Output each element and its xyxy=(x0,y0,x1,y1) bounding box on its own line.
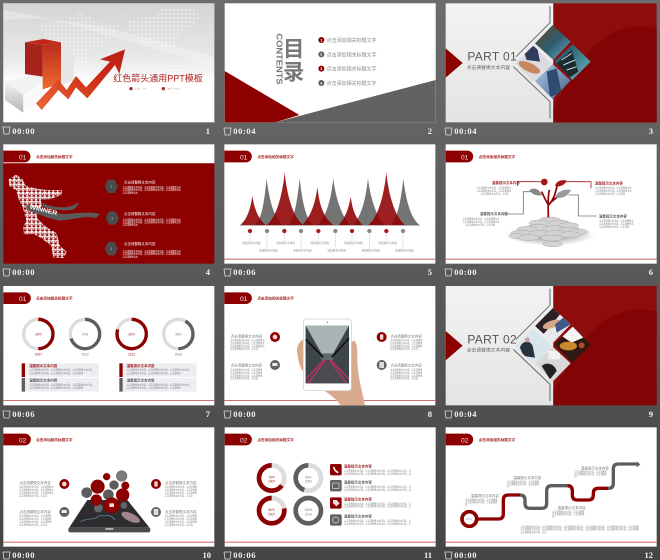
calendar item xyxy=(330,480,412,491)
slide header: 01 xyxy=(240,296,248,303)
timeline markers and labels: 请替换文字内容 xyxy=(259,249,278,253)
step text 3: 点击请替换文本内容，点击请替换 xyxy=(552,509,585,513)
ring 2010 xyxy=(70,319,100,357)
tag item: 点击请替换文本内容，点击请替换文本内容，点击请替换文本内容，点 xyxy=(344,504,412,508)
feature text right top: 点击请替换文本内容，点击请替换 xyxy=(165,485,198,489)
note 1: 点击请替换文本内容，点击请替换文本内容，点击请替换 xyxy=(29,371,84,375)
slide header xyxy=(224,151,294,162)
donut 50 percent: 50% xyxy=(305,475,312,479)
red right panel xyxy=(553,286,657,405)
connector lines xyxy=(503,182,597,216)
contents list: 点击添加相关标题文字 xyxy=(327,66,377,73)
feature text left top: 点击请替换文本内容 xyxy=(19,480,51,485)
list item 3: 点击请替换文本内容 xyxy=(124,241,156,246)
slide header: 01 xyxy=(19,296,27,303)
callout lower left xyxy=(463,211,508,226)
footer row 3: 00:04 xyxy=(454,409,477,419)
ring 2007: 30% xyxy=(35,332,42,336)
step text 3: 点击请替换文本内容，点击请替换 xyxy=(552,512,585,516)
step text 4: 温馨提示文本内容 xyxy=(581,465,609,470)
slide header xyxy=(3,151,73,162)
step text 4: 点击请替换文本内容，点击请替换 xyxy=(574,472,608,476)
slide 1: cover xyxy=(3,3,214,122)
slide header: 02 xyxy=(240,437,248,444)
feature text left top: 点击请替换文本内容，点击请 xyxy=(230,347,259,351)
contents heading: CONTENTS xyxy=(274,33,284,85)
contents heading xyxy=(274,33,304,85)
step text 1: 内 xyxy=(465,503,467,507)
list item 1: 点击请替换文本内容，点击请替换文本内容，点击请替换文本 xyxy=(123,185,182,189)
feature text left bottom: 点击请替换文本内容 xyxy=(231,363,263,368)
feature text right top: 点击请替换文本内容，点击请 xyxy=(165,494,194,498)
donut 80 percent xyxy=(259,498,284,523)
ring 2010: 2010 xyxy=(81,353,89,357)
callout top right: 点击请替换文本内容，点击请替 xyxy=(595,192,626,196)
footer row 1: 1 xyxy=(206,126,210,136)
feature text left top: 点击请替换文本内容，点击请替换文 xyxy=(19,488,54,492)
slide header xyxy=(446,151,516,162)
list item 2: 点击请替换文本内容，点击请替换文本内容，点击请替换文本 xyxy=(123,217,182,221)
contents list: 4 xyxy=(320,81,323,85)
step text 3: 内 xyxy=(552,515,554,519)
winding arrow path xyxy=(477,461,640,519)
timeline markers and labels: 请替换文字内容 xyxy=(395,249,414,253)
red pointer triangle xyxy=(446,331,463,360)
feature text left bottom: 点击请替换文本内容，点击请 xyxy=(230,376,259,380)
part heading: PART 02 xyxy=(467,332,517,346)
step text 2 xyxy=(507,475,542,489)
feature text right top: 点击请替换文本内容，点击请替换 xyxy=(390,344,423,348)
footer row 2: 4 xyxy=(206,267,211,277)
callout top left xyxy=(477,180,520,195)
list item 2: 2 xyxy=(111,216,113,220)
footer row 3: 8 xyxy=(428,409,432,419)
slide header: 02 xyxy=(19,437,27,444)
summary paragraph xyxy=(520,524,640,534)
slide 11: donut charts xyxy=(225,427,436,547)
callout top right xyxy=(595,181,632,196)
step text 1: 点击请替换文本内容，点击请替换 xyxy=(465,497,498,501)
feature text left bottom: 点击请替换文本内容，点击请 xyxy=(19,523,48,527)
calendar item: 温馨提示文本内容 xyxy=(344,480,372,485)
feature icon 2 xyxy=(59,507,69,517)
footer row 3: 7 xyxy=(206,409,211,419)
footer row 2: 00:00 xyxy=(12,267,35,277)
feature text right top: 点击请替换文本内容，点击请替换 xyxy=(390,338,423,342)
list item 1 xyxy=(105,179,182,194)
note 3: 温馨提示文本内容 xyxy=(127,363,155,368)
feature text right bottom: 点击请替换文本内容，点击请替换 xyxy=(165,520,198,524)
feature text right top: 点击请替换文本内容，点击请替换 xyxy=(165,491,198,495)
donut 50 percent: 2003 xyxy=(305,480,312,484)
timeline markers and labels: 请替换文字内容 xyxy=(344,241,363,245)
gray corner wedge xyxy=(275,80,436,122)
slide header xyxy=(224,292,294,304)
slide header: 点击添加相关标题文字 xyxy=(36,296,73,301)
footer row 4: 00:06 xyxy=(233,550,256,560)
footer row 4: 11 xyxy=(424,550,432,560)
start ring xyxy=(462,512,477,526)
note 4: 温馨提示文本内容 xyxy=(127,378,155,383)
photo diamonds xyxy=(514,23,592,100)
feature icon 4 xyxy=(151,507,161,517)
slide header: 01 xyxy=(19,154,27,161)
step text 1: 温馨提示文本内容 xyxy=(471,493,499,498)
feature text left bottom: 点击请替换文本内容，点击请替换 xyxy=(230,373,263,377)
footer row 1 xyxy=(3,126,653,136)
slide header: 点击添加相关标题文字 xyxy=(257,154,294,159)
summary paragraph: 点击请替换文本内容，点击请替换文本内容，点击请替换文本内容，点击请替换文本内容，点击请替换文本内容，点击请替换 xyxy=(520,527,640,531)
winner ribbon xyxy=(26,202,100,221)
note 1: 点击请替换文本内容，点击请替换文本内容，点击请替换文本内容， xyxy=(29,368,94,372)
slide header: 02 xyxy=(461,437,469,444)
contents list: 3 xyxy=(320,67,322,71)
list item 1: 点击请替换文本 xyxy=(123,190,139,194)
callout top left: 点击请替换文本内容，点击请替换文 xyxy=(477,185,512,189)
note 2: 点击请替换文本内容，点击请替换文本内容，点击请替换文本内容， xyxy=(29,382,94,386)
contents list: 点击添加相关标题文字 xyxy=(327,37,377,44)
list item 3: 点击请替换文本内容，点击请替换文本内容，点击请替换文本 xyxy=(123,252,182,256)
seedling xyxy=(529,179,571,217)
list item 1: 点击请替换文本内容 xyxy=(124,179,156,184)
footer row 3: 00:06 xyxy=(12,409,35,419)
callout top left: 点击请替换文本内容，点击请替换文 xyxy=(477,188,512,192)
slide header: 点击添加相关标题文字 xyxy=(479,154,516,159)
contents heading: 录 xyxy=(283,60,304,84)
coin pile xyxy=(505,217,595,247)
feature text left top: 点击请替换文本内容，点击请替换文 xyxy=(19,485,54,489)
clock item: 点击请替换文本内容，点击请替换文本内容，点击请替换文本内容，点 xyxy=(344,519,412,523)
red corner triangle xyxy=(225,71,299,122)
ring 2013 red: 60% xyxy=(129,332,135,336)
callout lower right: 点击请替换文本内容，点击请替 xyxy=(599,224,630,228)
feature text right bottom xyxy=(390,363,423,380)
note 3 xyxy=(119,363,197,377)
slide header xyxy=(446,434,516,445)
feature text left top xyxy=(19,480,54,498)
donut 70 percent xyxy=(259,465,284,491)
red right panel xyxy=(553,3,657,122)
callout top right: 点击请替换文本内容，点击请替换文本 xyxy=(595,186,632,190)
feature text left top: 点击请替换文本内容，点击请替换文 xyxy=(19,491,54,495)
calendar item: 点击请替换文本内容，点击请替换文本内容，点击请替换文本内容，点 xyxy=(344,485,412,489)
slide header xyxy=(3,434,73,445)
step text 2: 点击请替换文本内容，点击请替换 xyxy=(507,479,540,483)
feature text left bottom xyxy=(19,509,52,527)
step text 1 xyxy=(465,493,499,507)
feature text left bottom: 点击请替换文本内容 xyxy=(19,509,51,514)
phone item: 点击请替换文本内容，点击请替换文本内容，点击请替换文本内容，点 xyxy=(344,469,412,473)
note 3: 点击请替换文本内容，点击请替换文本内容，点击请替换 xyxy=(127,371,181,375)
hand holding tablet xyxy=(297,339,365,405)
feature text right top: 点击请替换文本内容，点击请替换 xyxy=(390,341,423,345)
slide header: 点击添加相关标题文字 xyxy=(257,296,294,301)
callout top right: 点击请替换文本内容，点击请替换文本 xyxy=(595,189,632,193)
donut 100 percent: 100% xyxy=(304,508,313,512)
feature text right bottom: 点击请替换文本内容，点击请替换 xyxy=(390,373,423,377)
timeline markers and labels: 请替换文字内容 xyxy=(378,241,397,245)
list item 2: 点击请替换文本 xyxy=(123,223,139,227)
callout lower right: 温馨提示文本内容 xyxy=(599,213,627,218)
phone item: 点击请替换文本内容，点击请替换文本内容，点击请替换文本内容，点 xyxy=(344,471,412,475)
step text 1: 点击请替换文本内容，点击请替换 xyxy=(465,500,498,504)
feature text left bottom: 点击请替换文本内容，点击请替换 xyxy=(19,520,52,524)
feature text right top xyxy=(390,333,423,351)
tag item: 温馨提示文本内容 xyxy=(344,496,372,501)
step text 2: 温馨提示文本内容 xyxy=(513,475,542,480)
presenter info: 汇报人：PPT xyxy=(135,87,148,91)
callout lower left: 点击请替换文本内容，点击请替换文本 xyxy=(463,219,500,223)
donut 100 percent xyxy=(296,498,321,523)
step text 2: 点击请替换文本内容，点击请替换 xyxy=(507,482,540,486)
ring 2013 red: 2013 xyxy=(128,353,135,357)
step text 3 xyxy=(552,505,586,519)
part heading: PART 01 xyxy=(467,50,517,64)
slide 2: contents xyxy=(225,3,436,122)
footer row 1: 00:00 xyxy=(12,126,35,136)
donut 100 percent: 2014 xyxy=(305,512,312,516)
slide 6: coin tree xyxy=(446,144,657,264)
ring 2007: 2007 xyxy=(35,353,42,357)
step text 4: 点击请替换文本内容，点击请替换 xyxy=(574,469,608,473)
callout lower right xyxy=(599,213,634,228)
feature text right bottom: 点击请替换文本内容，点击请替换 xyxy=(390,370,423,374)
contents heading: 目 xyxy=(283,38,304,62)
ring 2013 gray: 2013 xyxy=(175,353,182,357)
presenter info: 时间：2016.01 xyxy=(167,87,180,91)
ring 2013 gray: 40% xyxy=(175,332,182,336)
callout lower left: 温馨提示文本内容 xyxy=(480,211,508,216)
step text 3: 温馨提示文本内容 xyxy=(558,505,586,510)
slide 8: tablet in hand xyxy=(224,286,435,405)
callout top left: 点击请替换文本内容，点击请 xyxy=(481,191,510,195)
slide header: 点击添加相关标题文字 xyxy=(257,437,294,442)
phone item xyxy=(330,463,412,475)
slide 5: peak chart xyxy=(224,144,435,264)
feature text left top: 点击请替换文本内容，点击请替换文 xyxy=(230,338,265,342)
callout lower right: 点击请替换文本内容，点击请替换文 xyxy=(599,221,634,225)
step text 4 xyxy=(574,465,609,479)
callout top left: 温馨提示文本内容 xyxy=(492,180,520,185)
red content panel xyxy=(3,163,214,264)
feature text left top: 点击请替换文本内容，点击请替换文 xyxy=(230,341,265,345)
summary paragraph: 点击请替换文本内容，点击 xyxy=(520,530,547,534)
footer row 4: 10 xyxy=(202,550,211,560)
footer row 1: 00:04 xyxy=(233,126,256,136)
slide 12: winding road timeline xyxy=(446,427,657,547)
ring 2007 xyxy=(24,319,53,357)
callout lower left: 点击请替换文本内容，点击请替 xyxy=(465,222,496,226)
dotted world map xyxy=(38,8,200,77)
note 2 xyxy=(22,378,99,392)
footer row 4: 12 xyxy=(644,550,653,560)
feature text right top: 点击请替换文本内容，点击请 xyxy=(390,347,419,351)
slide header: 01 xyxy=(240,154,248,161)
feature text right top xyxy=(165,480,198,498)
clock item: 温馨提示文本内容 xyxy=(344,513,372,518)
list item 3: 3 xyxy=(110,247,112,251)
donut 80 percent: 80% xyxy=(269,508,275,512)
tag item xyxy=(330,496,412,509)
slide header: 01 xyxy=(461,154,469,161)
feature text left bottom xyxy=(230,363,263,380)
slide header: 点击添加相关标题文字 xyxy=(36,437,73,442)
tag item: 点击请替换文本内容，点击请替换文本内容，点击请替换文本内容，点 xyxy=(344,501,412,505)
donut 70 percent: 2007 xyxy=(268,480,275,484)
feature text left bottom: 点击请替换文本内容，点击请替换 xyxy=(230,367,263,371)
callout top right: 温馨提示文本内容 xyxy=(595,181,623,186)
list item 3: 点击请替换文本 xyxy=(123,254,139,258)
slide 9: part 02 xyxy=(446,286,657,405)
red rising arrow xyxy=(36,49,125,110)
timeline markers and labels: 请替换文字内容 xyxy=(310,241,329,245)
donut 70 percent: 70% xyxy=(269,475,275,479)
feature text right bottom: 点击请替换文本内容 xyxy=(165,509,197,514)
footer row 1: 3 xyxy=(649,126,653,136)
contents list: 1 xyxy=(320,38,322,42)
feature icon 3 xyxy=(377,332,387,342)
feature text right top: 点击请替换文本内容，点击请替换 xyxy=(165,488,198,492)
runner made of icons xyxy=(9,175,67,258)
feature icon 2 xyxy=(270,360,280,370)
feature text right bottom: 点击请替换文本内容，点击请替换 xyxy=(165,514,198,518)
contents list: 点击添加相关标题文字 xyxy=(327,80,377,87)
footer row 3: 9 xyxy=(649,409,653,419)
winner ribbon: WINNER xyxy=(29,204,59,217)
note 4 xyxy=(119,378,197,392)
footer row 4: 00:00 xyxy=(12,550,35,560)
bracket lines xyxy=(513,289,550,401)
footer row 1: 00:04 xyxy=(454,126,477,136)
list item 3: 点击请替换文本内容，点击请替换文本内容，点击请替换文本 xyxy=(123,249,182,253)
app bubbles xyxy=(81,470,129,513)
callout lower left: 点击请替换文本内容，点击请替换文本 xyxy=(463,216,500,220)
list item 2 xyxy=(106,211,182,227)
calendar item: 点击请替换文本内容，点击请替换文本内容，点击请替换文本内容，点 xyxy=(344,487,412,491)
footer row 1: 2 xyxy=(428,126,432,136)
black tablet xyxy=(68,500,150,532)
footer row 4 xyxy=(3,550,653,560)
list item 2: 点击请替换文本内容 xyxy=(124,211,156,216)
donut 50 percent xyxy=(296,465,321,491)
slide header xyxy=(225,434,294,445)
list item 1: 1 xyxy=(110,185,112,189)
footer row 3 xyxy=(3,409,653,419)
timeline markers and labels xyxy=(242,229,414,253)
timeline markers and labels: 请替换文字内容 xyxy=(242,241,261,245)
feature text right bottom: 点击请替换文本内容 xyxy=(390,363,422,368)
footer row 2: 6 xyxy=(649,267,653,277)
feature icon 4 xyxy=(377,360,387,370)
slide header xyxy=(3,292,73,304)
part subtitle: 点击请替换文本内容 xyxy=(467,347,510,354)
feature text right bottom: 点击请替换文本内容，点击请替换 xyxy=(165,517,198,521)
timeline markers and labels: 请替换文字内容 xyxy=(276,241,295,245)
timeline markers and labels: 请替换文字内容 xyxy=(327,249,346,253)
feature text left bottom: 点击请替换文本内容，点击请替换 xyxy=(19,517,52,521)
slide 7: ring charts xyxy=(3,286,214,405)
footer row 3: 00:00 xyxy=(233,409,256,419)
contents list: 2 xyxy=(320,53,322,57)
slide 3: part 01 xyxy=(446,3,657,122)
presenter info xyxy=(129,87,180,91)
note 3: 点击请替换文本内容，点击请替换文本内容，点击请替换文本内容， xyxy=(127,368,191,372)
slide 10: tablet with app bubbles xyxy=(3,427,214,547)
photo diamonds xyxy=(514,306,592,383)
note 4: 点击请替换文本内容，点击请替换文本内容，点击请替换 xyxy=(127,386,181,390)
step text 4: 内 xyxy=(574,475,577,479)
feature icon 3 xyxy=(151,479,161,489)
ring 2013 gray xyxy=(164,319,193,357)
feature text left top xyxy=(230,333,265,351)
slide header: 点击添加相关标题文字 xyxy=(479,437,516,442)
note 1: 温馨提示文本内容 xyxy=(29,363,58,368)
tablet with corridor photo xyxy=(303,319,351,391)
donut 80 percent: 2007 xyxy=(268,512,275,516)
timeline markers and labels: 请替换文字内容 xyxy=(293,249,312,253)
clock item xyxy=(330,513,412,526)
contents list xyxy=(318,37,377,87)
phone item: 温馨提示文本内容 xyxy=(344,463,372,468)
footer row 4: 00:00 xyxy=(454,550,477,560)
ring 2010: 70% xyxy=(82,332,88,336)
footer row 2: 00:06 xyxy=(233,267,256,277)
3D red cube and white box xyxy=(5,39,74,113)
cover title: 红色箭头通用PPT模板 xyxy=(113,73,203,84)
note 2: 温馨提示文本内容 xyxy=(29,378,58,383)
part subtitle: 点击请替换文本内容 xyxy=(467,64,510,71)
summary paragraph: 点击请替换文本内容，点击请替换文本内容，点击请替换文本内容，点击请替换文本内容，点击请替换文本内容，点击请替换 xyxy=(520,524,640,528)
note 1 xyxy=(22,363,99,377)
callout lower right: 点击请替换文本内容，点击请替换文 xyxy=(599,218,634,222)
red pointer triangle xyxy=(446,48,463,78)
note 4: 点击请替换文本内容，点击请替换文本内容，点击请替换文本内容， xyxy=(127,382,191,386)
step text 2: 内 xyxy=(507,485,509,489)
feature text left top: 点击请替换文本内容 xyxy=(231,333,263,338)
note 2: 点击请替换文本内容，点击请替换文本内容，点击请替换 xyxy=(29,386,84,390)
list item 2: 点击请替换文本内容，点击请替换文本内容，点击请替换文本 xyxy=(123,220,182,224)
feature text right bottom: 点击请替换文本内容，点击请替换 xyxy=(390,367,423,371)
feature text left bottom: 点击请替换文本内容，点击请替换 xyxy=(230,370,263,374)
feature icon 1 xyxy=(270,332,280,342)
start ring: 2017 xyxy=(466,517,473,521)
feature text right bottom: 点击请替换文本内容，点击请 xyxy=(165,523,194,527)
feature text right top: 点击请替换文本内容 xyxy=(165,480,197,485)
peak chart xyxy=(240,172,420,226)
slide 4: winner xyxy=(3,144,214,264)
feature text left top: 点击请替换文本内容，点击请替换文 xyxy=(230,344,265,348)
bracket lines xyxy=(513,6,550,118)
slide header: 点击添加相关标题文字 xyxy=(36,154,73,159)
footer row 2 xyxy=(3,267,653,277)
feature text left bottom: 点击请替换文本内容，点击请替换 xyxy=(19,514,52,518)
feature text right bottom: 点击请替换文本内容，点击请 xyxy=(390,376,419,380)
list item 1: 点击请替换文本内容，点击请替换文本内容，点击请替换文本 xyxy=(123,188,182,192)
list item 3 xyxy=(105,241,182,258)
contents list: 点击添加相关标题文字 xyxy=(327,51,377,58)
clock item: 点击请替换文本内容，点击请替换文本内容，点击请替换文本内容，点 xyxy=(344,521,412,525)
ring 2013 red xyxy=(117,319,146,357)
feature text right bottom xyxy=(165,509,198,527)
feature icon 1 xyxy=(59,479,69,489)
footer row 2: 00:00 xyxy=(454,267,477,277)
footer row 2: 5 xyxy=(428,267,432,277)
feature text right top: 点击请替换文本内容 xyxy=(390,333,422,338)
feature text left top: 点击请替换文本内容，点击请 xyxy=(19,494,48,498)
timeline markers and labels: 请替换文字内容 xyxy=(361,249,380,253)
